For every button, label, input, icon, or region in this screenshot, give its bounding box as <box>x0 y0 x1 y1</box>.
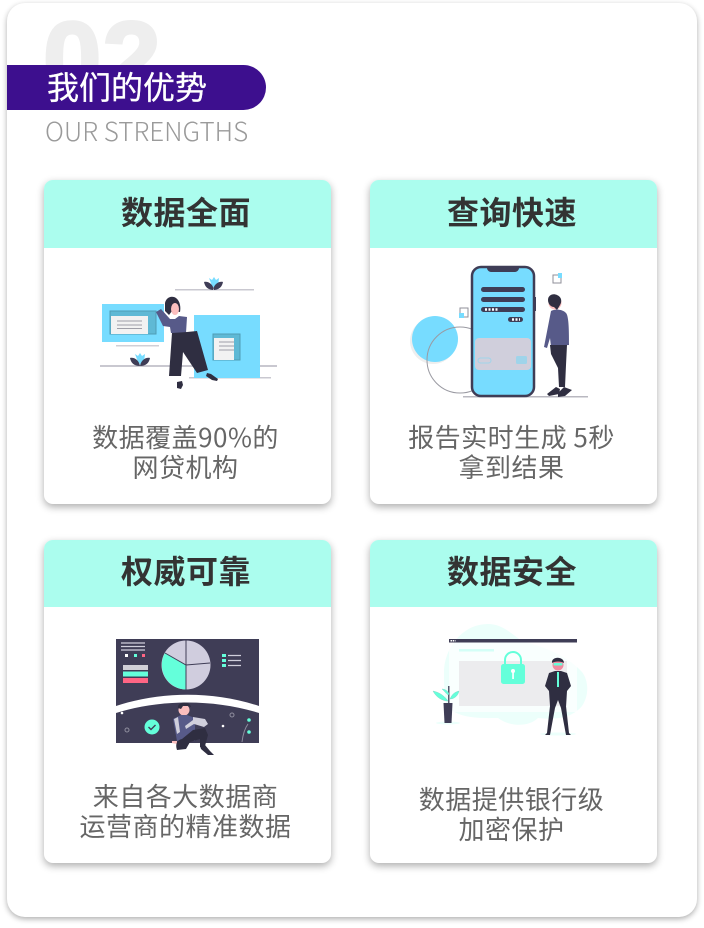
illustration: lock and suited man <box>432 624 588 736</box>
card heading: 查询快速 <box>447 188 577 234</box>
card: authoritative <box>44 540 331 863</box>
illustration: phone and man <box>410 266 588 398</box>
card description: 网贷机构 <box>132 448 238 485</box>
man <box>548 296 562 310</box>
figure <box>165 297 180 315</box>
card heading <box>44 540 331 607</box>
man <box>540 732 576 736</box>
plant <box>436 722 460 724</box>
card description: 运营商的精准数据 <box>79 807 292 844</box>
card description <box>419 780 604 847</box>
card heading: 数据安全 <box>447 547 577 593</box>
card description <box>79 777 292 844</box>
card: comprehensive data <box>44 180 331 504</box>
card heading <box>370 540 657 607</box>
leaves <box>209 277 219 289</box>
card description: 拿到结果 <box>458 448 564 485</box>
illustration: woman with documents <box>100 277 277 389</box>
card heading: 数据全面 <box>121 188 251 234</box>
card description <box>408 418 615 485</box>
man <box>178 704 190 716</box>
card description: 数据提供银行级 <box>419 780 604 817</box>
card description: 报告实时生成 5秒 <box>408 418 615 455</box>
card description: 来自各大数据商 <box>93 777 278 814</box>
card: data security <box>370 540 657 863</box>
card heading <box>370 180 657 248</box>
card description <box>92 418 279 485</box>
card heading <box>44 180 331 248</box>
section title badge <box>7 65 266 110</box>
card description: 数据覆盖90%的 <box>92 418 279 455</box>
section title badge: 我们的优势 <box>47 63 207 109</box>
card: fast query <box>370 180 657 504</box>
English subtitle: OUR STRENGTHS <box>45 112 248 149</box>
card heading: 权威可靠 <box>121 547 251 593</box>
illustration: dashboard with seated man <box>116 639 259 755</box>
card description: 加密保护 <box>458 810 564 847</box>
